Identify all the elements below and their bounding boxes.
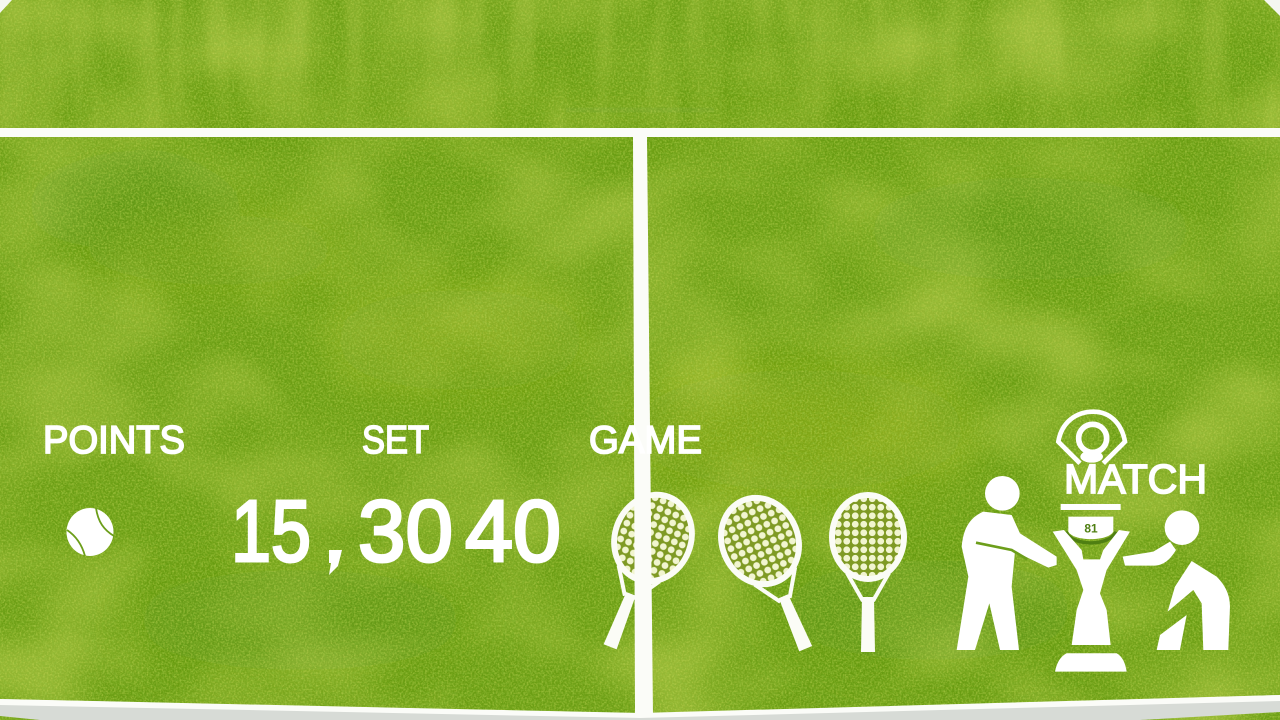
label: GAME: GAME (589, 419, 702, 462)
racket 1 (575, 483, 704, 661)
match scene: players and trophy (957, 412, 1230, 672)
icon: umpire chair emblem (1058, 412, 1125, 463)
racket 3 (832, 495, 904, 652)
racket 2 (708, 486, 841, 664)
right player (1123, 510, 1230, 650)
icon: tennis ball (66, 508, 114, 556)
score numbers: 40 (465, 483, 561, 580)
score numbers (231, 483, 561, 580)
label: POINTS: POINTS (43, 419, 185, 462)
center service line (633, 137, 653, 716)
score numbers: 30 (358, 483, 453, 580)
label: SET: SET (362, 419, 429, 462)
trophy: 81 (1084, 521, 1098, 535)
left player (957, 476, 1057, 650)
score numbers: 15 (231, 483, 311, 580)
label: MATCH: MATCH (1064, 456, 1207, 502)
trophy (1053, 504, 1130, 672)
